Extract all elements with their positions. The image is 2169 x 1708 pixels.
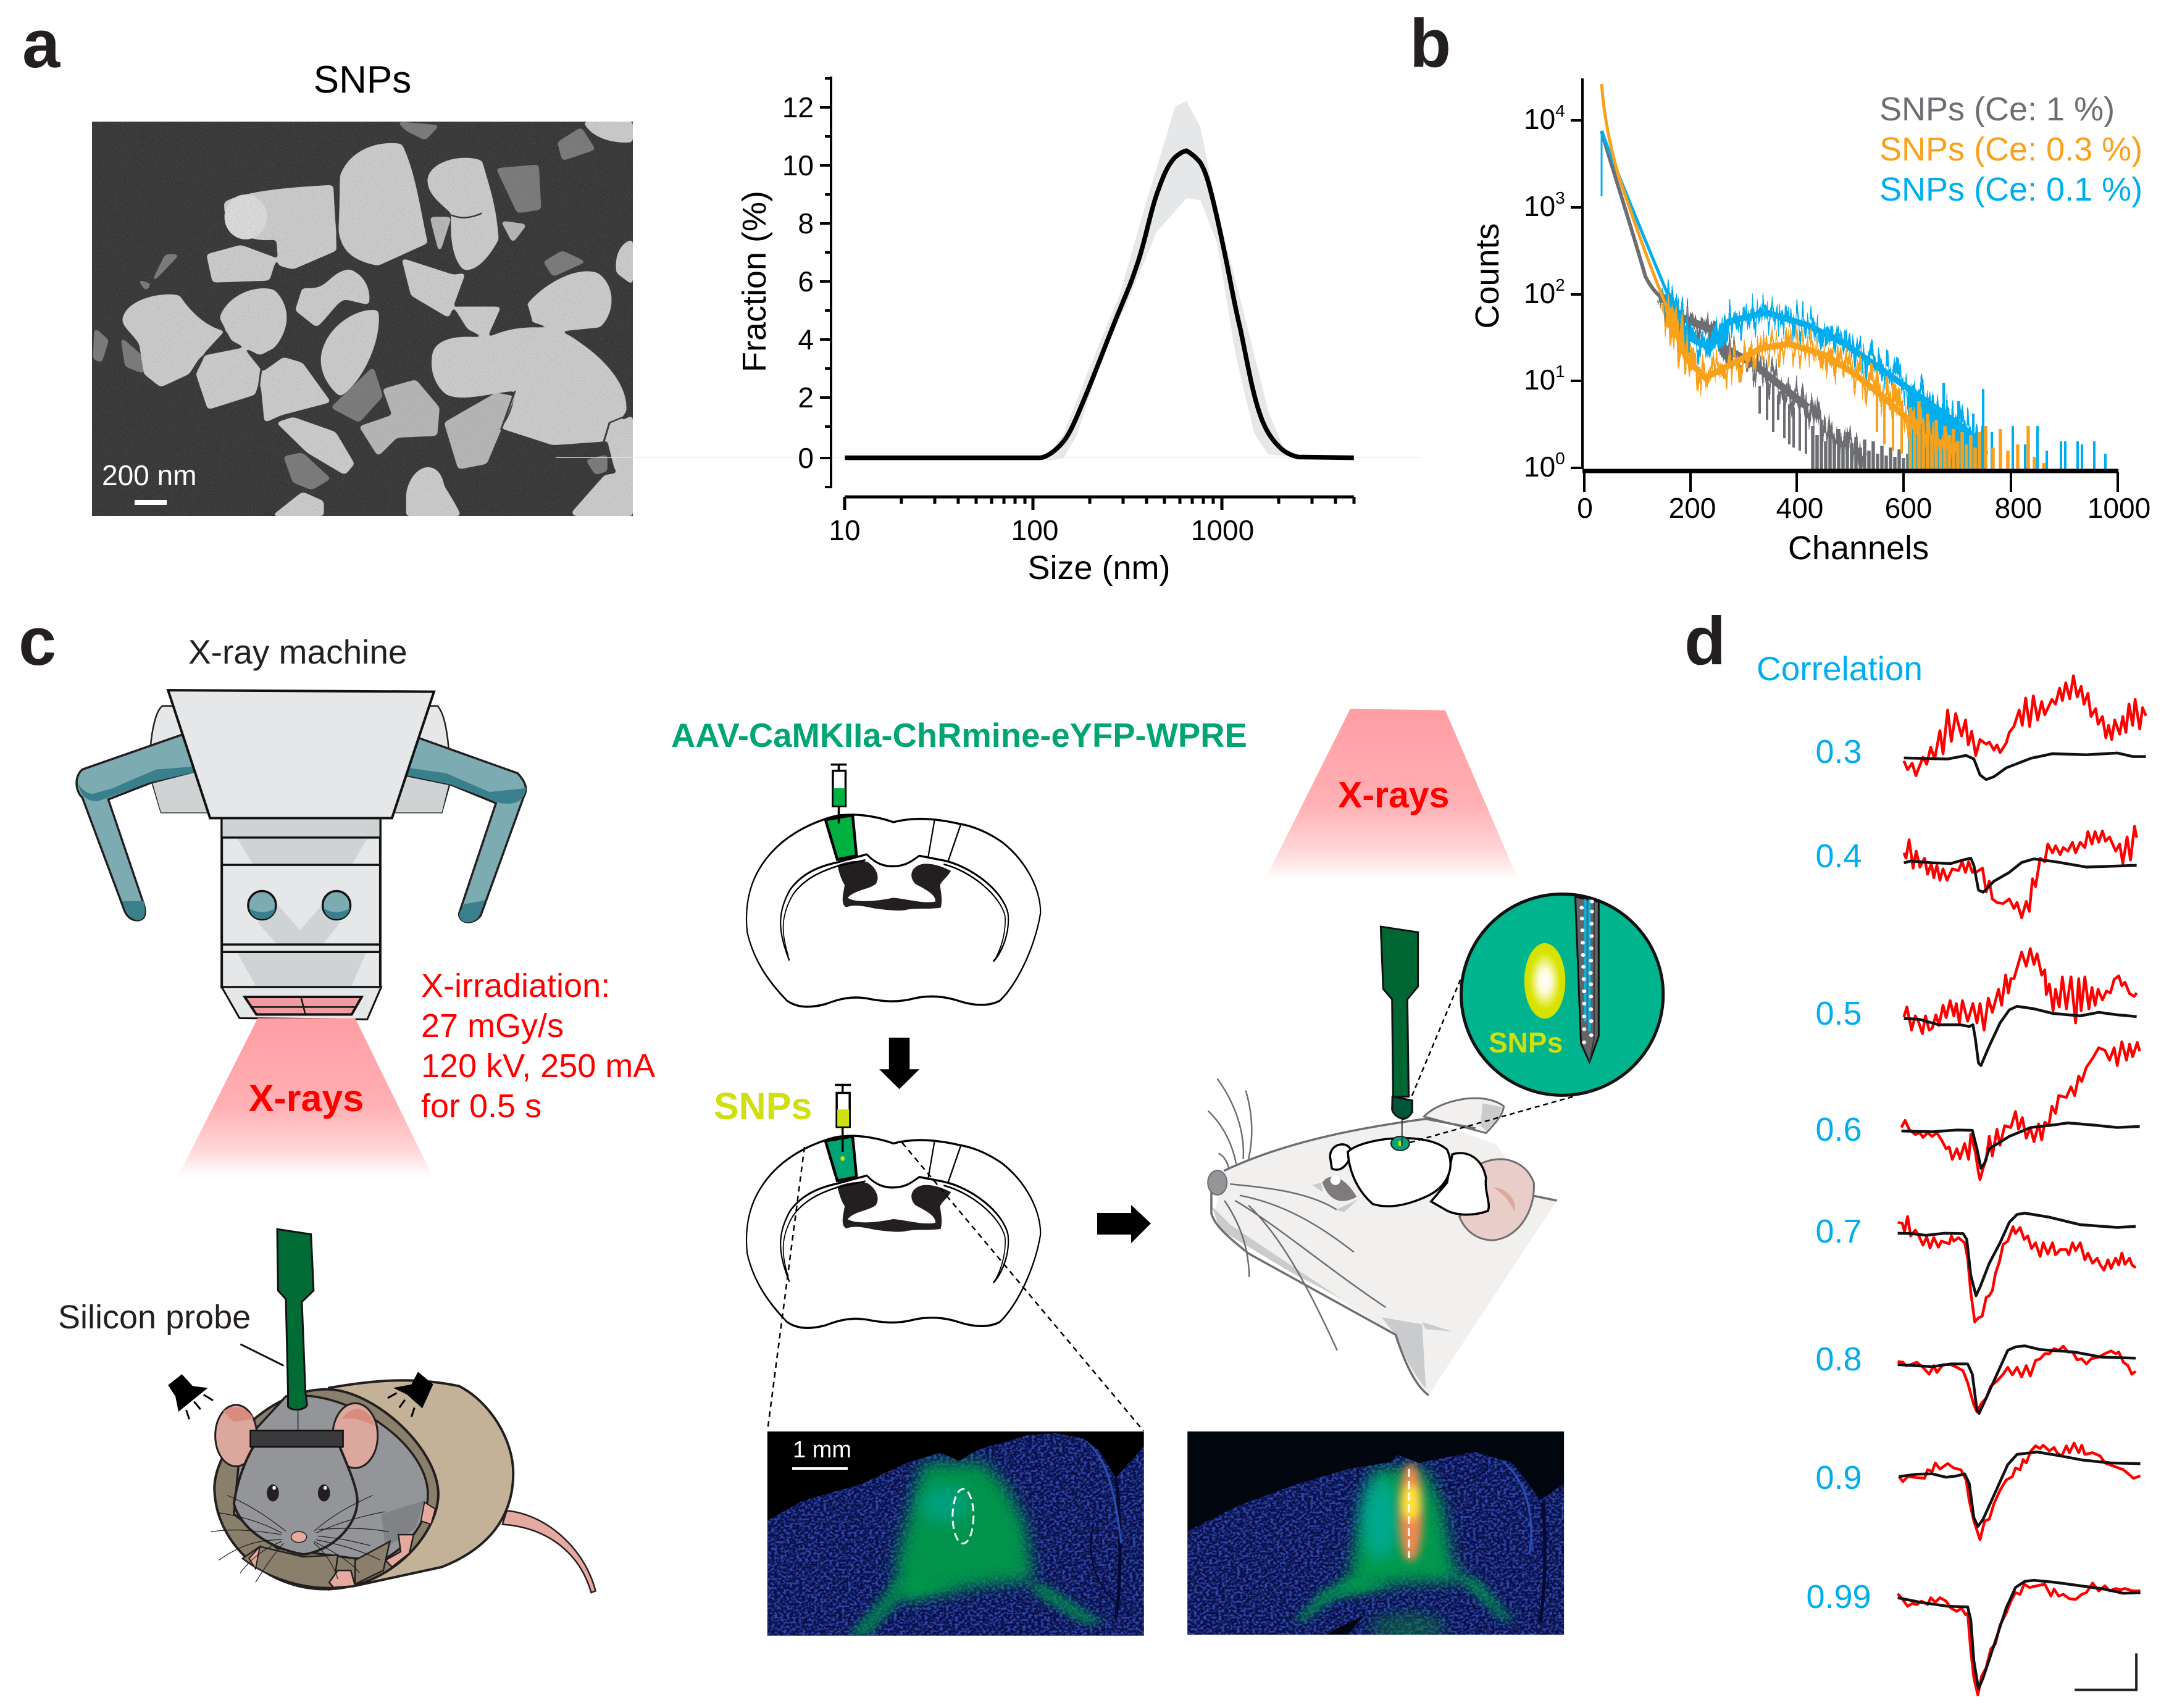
jaw shadows <box>1212 1206 1340 1298</box>
text: X-irradiation parameters: 120 kV, 250 mA <box>421 1048 655 1085</box>
probe <box>1381 927 1418 1097</box>
tube <box>329 1380 513 1589</box>
panel label a: a <box>22 6 61 82</box>
head outline <box>1211 1119 1557 1395</box>
x tick labels: 1000 <box>2088 492 2150 524</box>
brain section with SNP injection <box>746 1085 1040 1328</box>
brain overlay <box>1330 1144 1352 1170</box>
icon: X-ray machine <box>77 690 526 1019</box>
nose <box>291 1531 307 1543</box>
whiskers <box>211 1495 389 1582</box>
x tick labels: 10 <box>829 514 861 546</box>
arrow down <box>879 1038 919 1089</box>
x axis <box>1582 472 2118 492</box>
mouse body <box>234 1396 428 1559</box>
values: correlation labels <box>1806 733 1871 1615</box>
y tick labels: 10 <box>782 149 814 181</box>
values: correlation labels: 0.6 <box>1815 1111 1862 1148</box>
panel d: waveform correlation <box>1684 603 2146 1695</box>
y tick labels: 2 <box>798 381 814 414</box>
x tick labels: 1000 <box>1191 514 1254 546</box>
head bar <box>250 1430 343 1447</box>
y axis <box>820 77 831 488</box>
y tick labels: 10 <box>1524 190 1555 222</box>
values: correlation labels: 0.9 <box>1815 1459 1862 1496</box>
y tick labels: 1 <box>1555 362 1565 381</box>
dashed zoom lines to histology <box>767 1143 1143 1431</box>
panel label b: b <box>1410 6 1451 81</box>
y tick labels: 4 <box>798 323 814 356</box>
dashed probe track <box>1408 1469 1410 1558</box>
X-ray cone right <box>1264 709 1519 880</box>
legend: Ce 0.1%: SNPs (Ce: 0.1 %) <box>1879 171 2142 208</box>
construct label: AAV-CaMKIIa-ChRmine-eYFP-WPRE <box>671 717 1247 754</box>
illustration: head-fixed mouse in tube <box>168 1229 596 1593</box>
y tick labels <box>782 91 814 474</box>
panel a: SEM image and size distribution <box>22 6 1420 586</box>
label: SNPs inset: SNPs <box>1489 1027 1563 1059</box>
probe shank <box>1575 897 1599 1062</box>
y tick labels: 10 <box>1524 364 1555 396</box>
whiskers <box>1208 1079 1385 1351</box>
x tick labels <box>829 514 1254 546</box>
text: X-irradiation parameters: 27 mGy/s <box>421 1007 564 1044</box>
size distribution chart <box>736 77 1354 586</box>
inset circle <box>1461 894 1663 1095</box>
y axis title: Fraction (%) <box>736 191 773 372</box>
y tick labels: 0 <box>798 442 814 474</box>
y axis log <box>1571 78 1582 469</box>
wire <box>298 1409 299 1430</box>
SNP glow <box>1524 943 1565 1019</box>
y tick labels: 6 <box>798 265 814 298</box>
x tick labels: 800 <box>1995 492 2042 524</box>
heading: Correlation: Correlation <box>1757 649 1923 688</box>
label: Silicon probe: Silicon probe <box>58 1299 251 1336</box>
x tick labels: 400 <box>1776 492 1823 524</box>
values: correlation labels: 0.3 <box>1815 733 1862 770</box>
panel label d: d <box>1684 603 1726 679</box>
values: correlation labels: 0.5 <box>1815 995 1862 1032</box>
syringe SNPs <box>835 1085 851 1152</box>
back ear <box>1424 1098 1503 1133</box>
brain section with AAV injection <box>746 765 1040 1007</box>
y tick labels: 10 <box>1524 277 1555 309</box>
SEM scale bar <box>135 500 167 505</box>
mean size curve <box>845 151 1354 458</box>
X-ray cone left <box>178 1019 433 1177</box>
legend: Ce 0.3%: SNPs (Ce: 0.3 %) <box>1879 131 2142 168</box>
ear <box>1460 1159 1534 1240</box>
text: X-irradiation parameters: for 0.5 s <box>421 1088 541 1125</box>
silicon probe <box>277 1229 314 1410</box>
label: X-rays: X-rays <box>249 1077 364 1119</box>
scale label: 1 mm <box>793 1437 851 1463</box>
values: correlation labels: 0.4 <box>1815 838 1862 875</box>
label: X-rays: X-rays <box>1338 775 1449 815</box>
y tick labels: 8 <box>798 207 814 240</box>
y tick labels: 0 <box>1555 449 1565 468</box>
x axis title: Channels <box>1788 530 1929 567</box>
paws <box>385 1535 414 1567</box>
injection spot <box>1391 1136 1410 1151</box>
y tick labels: 10 <box>1524 103 1555 135</box>
y tick labels <box>1524 101 1565 483</box>
x tick labels: 100 <box>1011 514 1058 546</box>
scale bar <box>792 1467 848 1470</box>
x tick labels: 0 <box>1577 492 1593 524</box>
x axis <box>845 497 1354 510</box>
text: X-irradiation parameters: X-irradiation: <box>421 967 610 1004</box>
values: correlation labels: 0.7 <box>1815 1213 1862 1250</box>
blue spectrum Ce 0.1% <box>1602 131 2105 469</box>
eyes <box>267 1485 279 1501</box>
x tick labels: 200 <box>1669 492 1716 524</box>
label: SNPs injection: SNPs <box>714 1085 812 1127</box>
histology image: after SNP injection <box>767 1431 1144 1636</box>
illustration: rat head with probe <box>1208 894 1663 1395</box>
heading: SNPs: SNPs <box>314 59 411 101</box>
panel label c: c <box>19 604 56 680</box>
y tick labels: 10 <box>1524 451 1555 483</box>
label: X-ray machine: X-ray machine <box>188 633 407 671</box>
needle <box>1402 1117 1403 1146</box>
tube lower lip <box>243 1546 338 1588</box>
orange spectrum Ce 0.3% <box>1602 84 2044 469</box>
values: correlation labels: 0.8 <box>1815 1341 1862 1378</box>
y tick labels: 4 <box>1555 101 1565 120</box>
y tick labels: 2 <box>1555 275 1565 294</box>
leader line <box>240 1344 283 1365</box>
tail <box>503 1510 596 1593</box>
syringe AAV <box>831 765 846 823</box>
SEM scale label: 200 nm <box>102 459 196 491</box>
head <box>234 1432 357 1554</box>
eye <box>1323 1177 1356 1201</box>
traces 0.3 to 0.6 <box>1902 676 2146 1180</box>
y tick labels: 3 <box>1555 188 1565 207</box>
x tick labels <box>1577 492 2150 524</box>
values: correlation labels: 0.99 <box>1806 1578 1871 1615</box>
panel c: experiment schematic <box>19 604 1663 1643</box>
tube opening <box>214 1389 438 1589</box>
shaded error band <box>1045 101 1287 460</box>
legend: Ce 1%: SNPs (Ce: 1 %) <box>1879 91 2115 128</box>
left lamp <box>168 1374 208 1412</box>
y axis title: Counts <box>1469 223 1506 329</box>
traces 0.7 to 0.99 <box>1898 1213 2141 1695</box>
x axis title: Size (nm) <box>1027 549 1171 586</box>
nose <box>1208 1170 1227 1195</box>
dashed inset lines <box>1410 980 1573 1143</box>
ears <box>215 1405 257 1466</box>
faint baseline line <box>556 457 1420 458</box>
histology image: after X-ray <box>1187 1431 1564 1643</box>
gray spectrum Ce 1% <box>1602 131 1939 469</box>
x tick labels: 600 <box>1885 492 1932 524</box>
panel b: pulse height spectra <box>1410 6 2150 567</box>
scale bar <box>2075 1653 2136 1690</box>
right lamp <box>393 1372 433 1409</box>
head <box>1213 1119 1557 1395</box>
arrow right <box>1097 1205 1151 1243</box>
SEM micrograph of particles <box>92 122 633 516</box>
y tick labels: 12 <box>782 91 814 123</box>
